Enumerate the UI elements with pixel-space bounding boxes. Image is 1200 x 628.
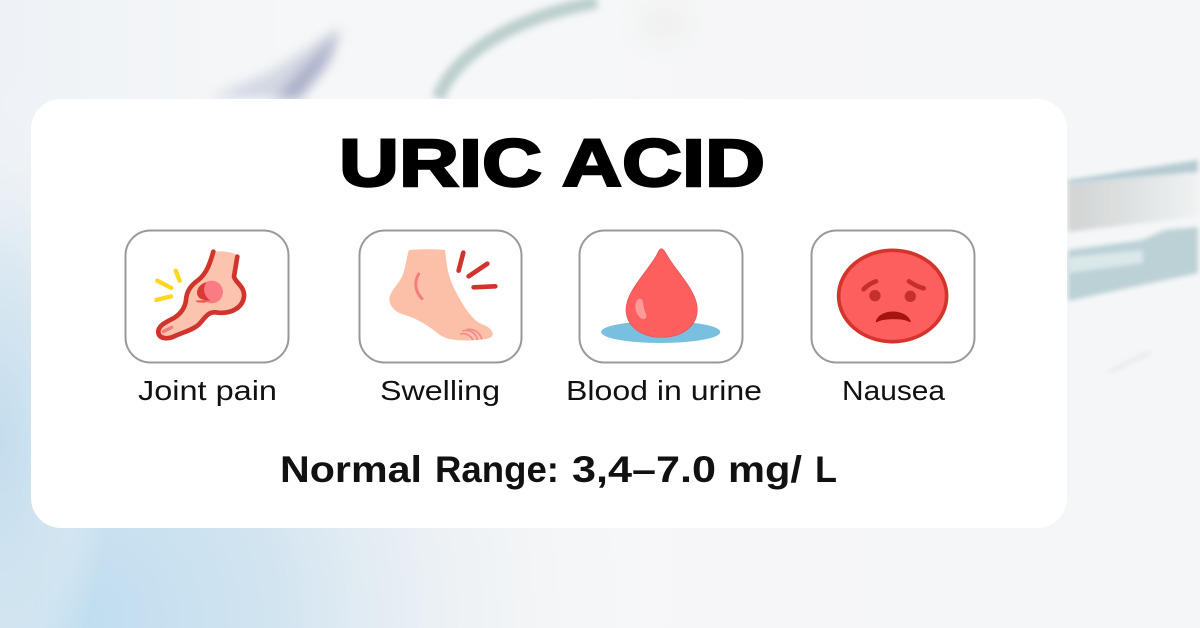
label: swelling: Swelling bbox=[380, 375, 500, 406]
icon: sad face bbox=[839, 250, 947, 342]
label: joint pain: Joint pain bbox=[138, 375, 277, 406]
normal range text bbox=[280, 449, 837, 490]
normal range text: Range: bbox=[435, 449, 559, 490]
label: blood in urine: Blood in urine bbox=[566, 375, 762, 406]
normal range text: 3,4–7.0 bbox=[572, 449, 716, 490]
icon: swollen foot bbox=[389, 249, 495, 340]
icon: painful foot joint bbox=[156, 251, 244, 338]
panel: blood in urine bbox=[566, 230, 762, 406]
panel: nausea bbox=[812, 230, 974, 406]
normal range text: L bbox=[815, 449, 837, 490]
title: URIC ACID bbox=[339, 126, 765, 201]
icon: blood drop on puddle bbox=[601, 249, 720, 343]
white card panel bbox=[31, 99, 1067, 528]
panel: swelling bbox=[360, 230, 522, 406]
normal range text: mg/ bbox=[728, 449, 802, 490]
panel: joint pain bbox=[126, 230, 288, 406]
normal range text: Normal bbox=[280, 449, 422, 490]
label: nausea: Nausea bbox=[842, 375, 945, 406]
